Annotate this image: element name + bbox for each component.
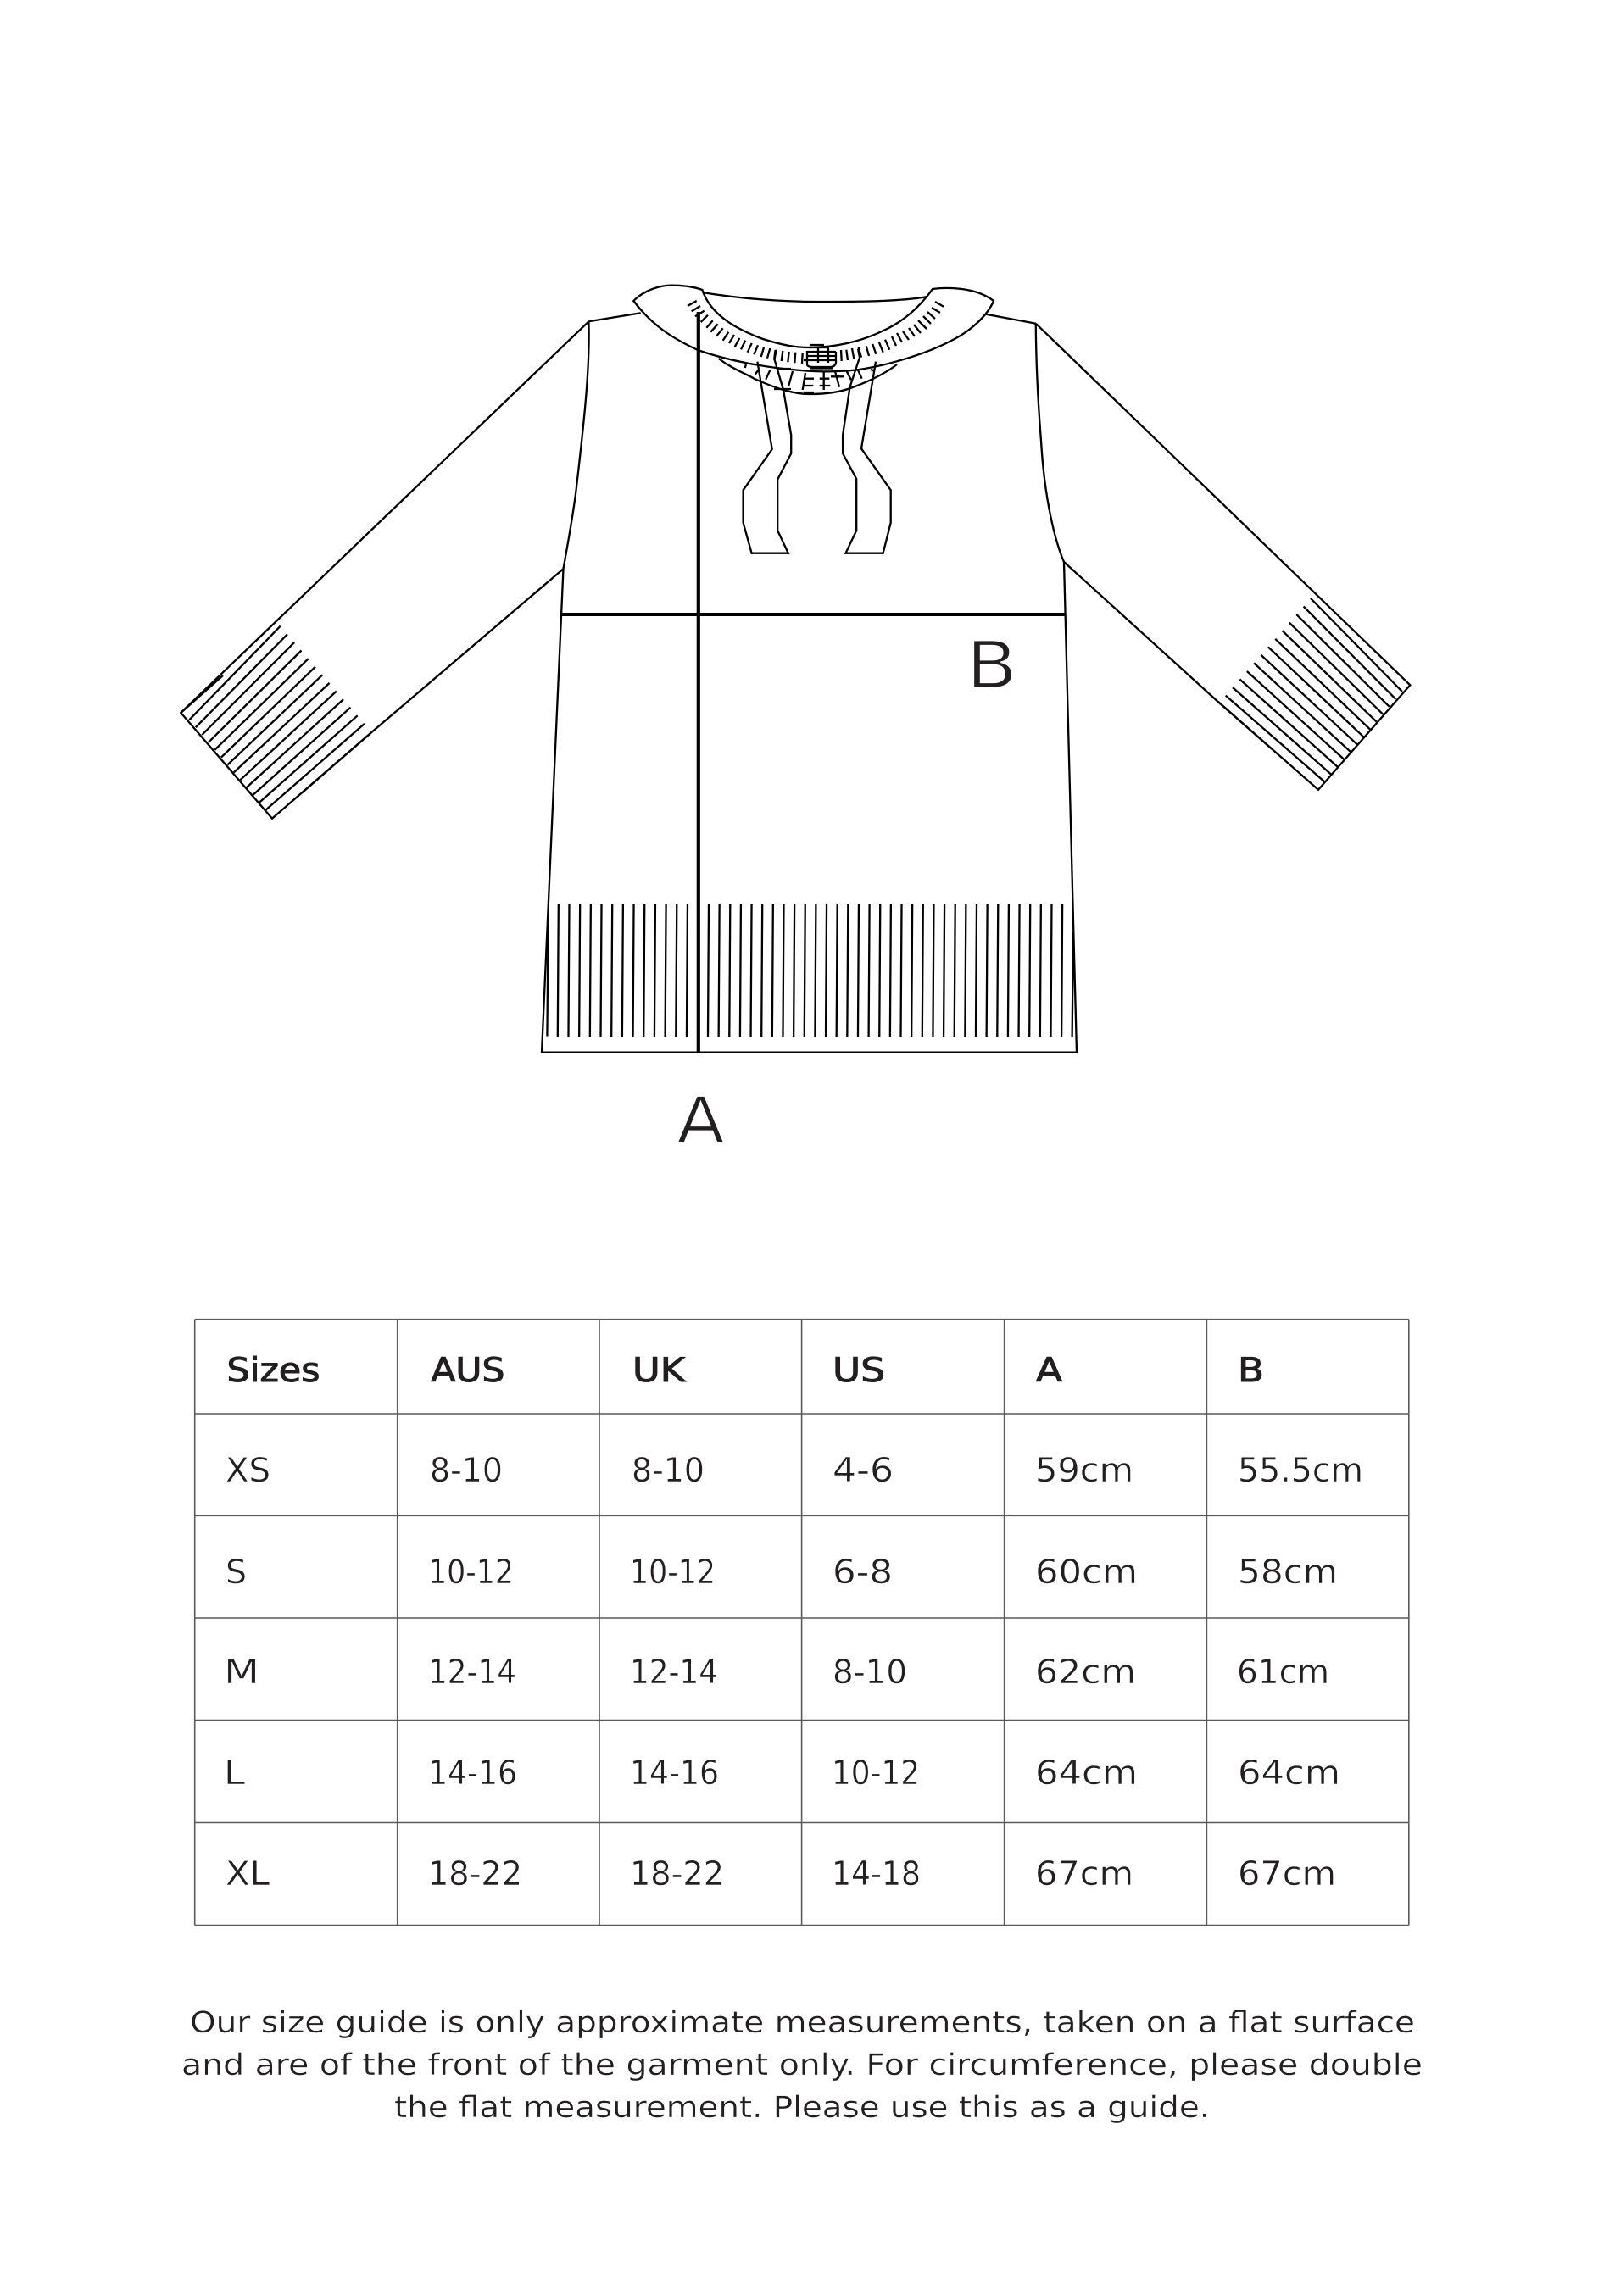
row XS: 55.5cm (1238, 1452, 1363, 1490)
row S: 10-12 (630, 1554, 716, 1592)
label B: B (966, 629, 1017, 703)
drawstring left (744, 350, 791, 553)
measurement line A (697, 312, 700, 1053)
row M: 61cm (1237, 1654, 1329, 1692)
row XS: 8-10 (632, 1452, 705, 1490)
row S: S (226, 1554, 247, 1592)
garment technical drawing (181, 286, 1410, 1159)
row XL: XL (226, 1855, 270, 1893)
row XL: 67cm (1238, 1855, 1336, 1893)
row S (226, 1554, 1338, 1592)
hem ribbing (547, 904, 1073, 1037)
header row: AUS (431, 1352, 504, 1390)
label A: A (677, 1084, 725, 1159)
collar (633, 286, 994, 371)
row L (224, 1754, 1340, 1793)
left cuff ribbing (189, 626, 365, 810)
collar button detail (804, 345, 836, 368)
measurement line B (560, 613, 1066, 616)
header row (227, 1352, 1264, 1390)
right cuff ribbing (1226, 598, 1402, 782)
disclaimer text: and are of the front of the garment only. For circumference, please double (181, 2049, 1423, 2082)
row M: M (224, 1654, 259, 1692)
row L: 64cm (1035, 1754, 1138, 1793)
row S: 10-12 (428, 1554, 514, 1592)
row XS (226, 1452, 1363, 1490)
drawstring right (843, 349, 891, 553)
row XL: 67cm (1035, 1855, 1133, 1893)
header row: A (1036, 1352, 1062, 1390)
disclaimer text: Our size guide is only approximate measurements, taken on a flat surface (190, 2006, 1415, 2040)
row L: 64cm (1238, 1754, 1340, 1793)
neck band ticks (745, 364, 872, 392)
lower neck band (719, 359, 897, 394)
row S: 6-8 (833, 1554, 893, 1592)
row XL: 14-18 (832, 1855, 921, 1893)
table grid (195, 1320, 1409, 1926)
garment body outline (542, 321, 1077, 1053)
disclaimer text (181, 2006, 1423, 2125)
row S: 58cm (1238, 1554, 1338, 1592)
row L: 14-16 (428, 1754, 517, 1793)
shoulder seams (588, 313, 1036, 324)
collar outline (633, 286, 994, 371)
row XS: 59cm (1035, 1452, 1133, 1490)
header row: US (833, 1352, 885, 1390)
back neckline (702, 292, 927, 302)
row M (224, 1654, 1329, 1692)
row XS: 8-10 (430, 1452, 503, 1490)
row M: 12-14 (630, 1654, 718, 1692)
row M: 8-10 (833, 1654, 907, 1692)
row L: 10-12 (832, 1754, 920, 1793)
row XS: 4-6 (833, 1452, 894, 1490)
right sleeve (1036, 324, 1410, 790)
row XL (226, 1855, 1336, 1893)
row XL: 18-22 (630, 1855, 724, 1893)
header row: B (1238, 1352, 1264, 1390)
row M: 12-14 (428, 1654, 516, 1692)
left sleeve (181, 321, 588, 819)
collar ribbing ticks (688, 301, 944, 364)
row XL: 18-22 (428, 1855, 522, 1893)
row XS: XS (226, 1452, 270, 1490)
header row: UK (632, 1352, 687, 1390)
row S: 60cm (1035, 1554, 1138, 1592)
row L: L (224, 1754, 245, 1793)
header row: Sizes (227, 1352, 320, 1390)
row M: 62cm (1035, 1654, 1136, 1692)
size table (195, 1320, 1409, 1926)
disclaimer text: the flat measurement. Please use this as a guide. (394, 2091, 1210, 2125)
row L: 14-16 (630, 1754, 719, 1793)
